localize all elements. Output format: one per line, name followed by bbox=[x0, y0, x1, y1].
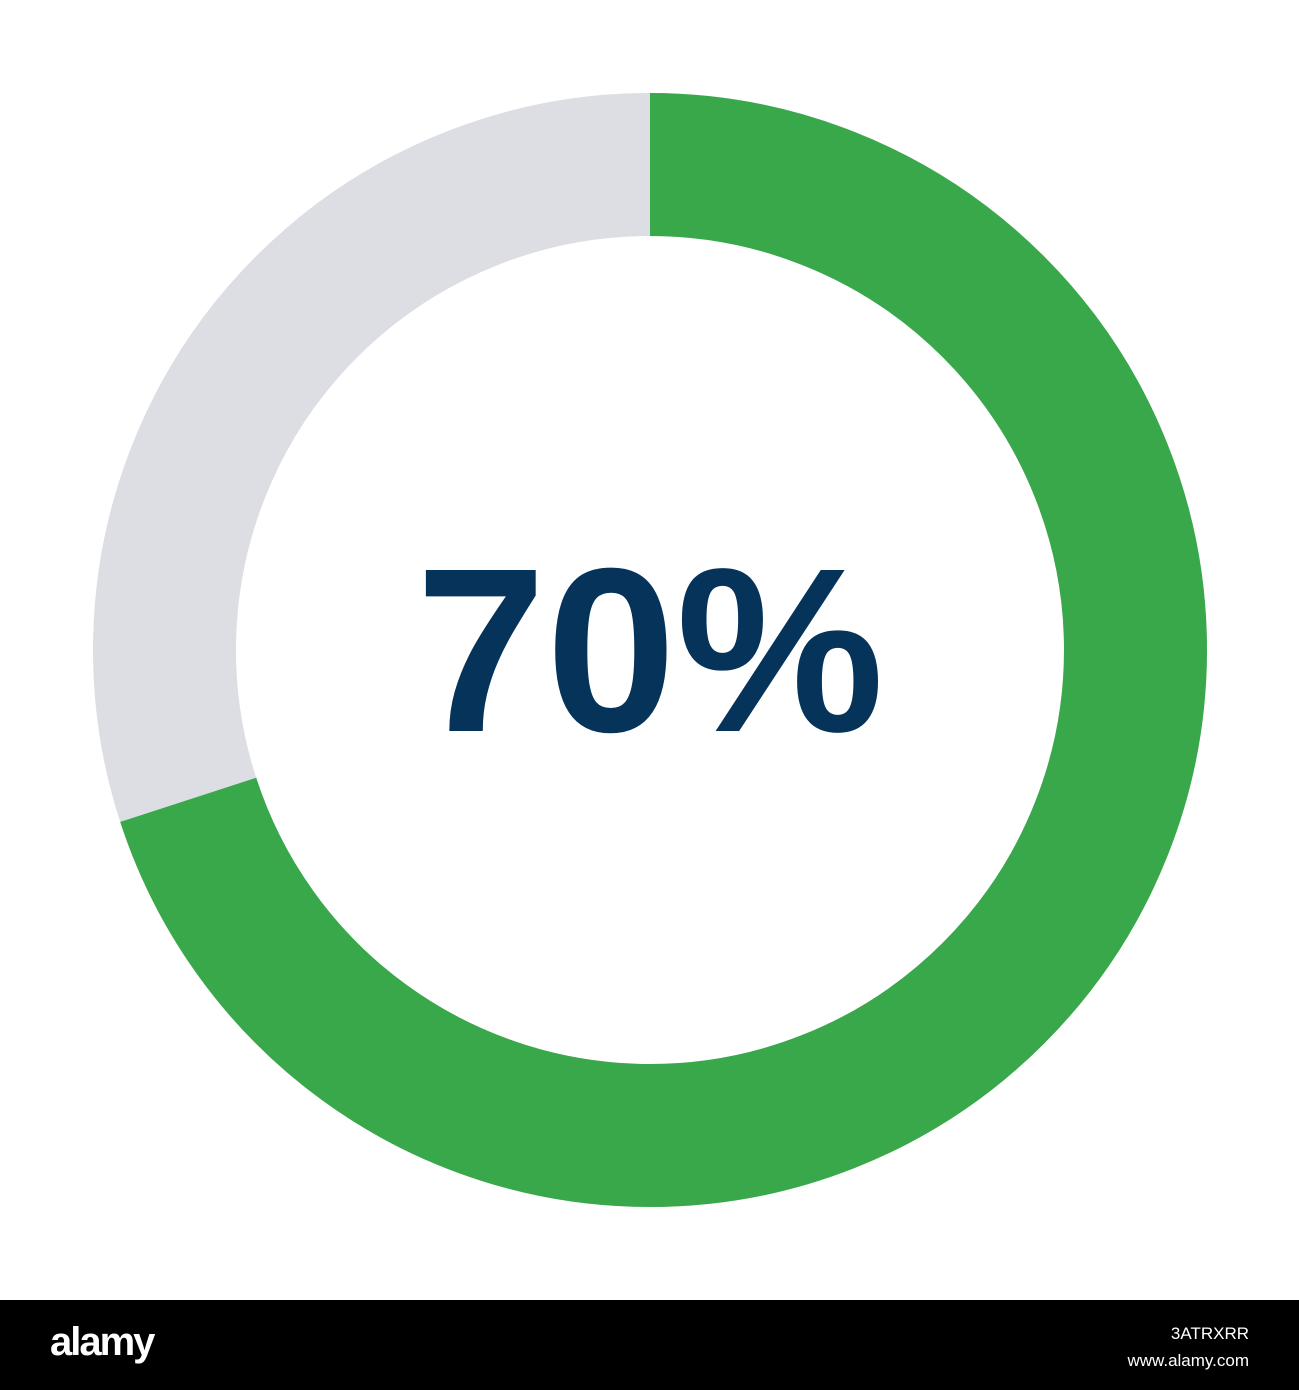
footer image id bbox=[1127, 1324, 1249, 1370]
footer bar bbox=[0, 1300, 1299, 1390]
footer image id: 3ATRXRR bbox=[1171, 1324, 1249, 1343]
progress arc 70% bbox=[164, 164, 1136, 1136]
percentage label: 70% bbox=[416, 519, 884, 781]
track ring bbox=[164, 164, 1136, 1136]
footer image id: www.alamy.com bbox=[1127, 1351, 1249, 1370]
footer logo: alamy bbox=[50, 1320, 153, 1364]
